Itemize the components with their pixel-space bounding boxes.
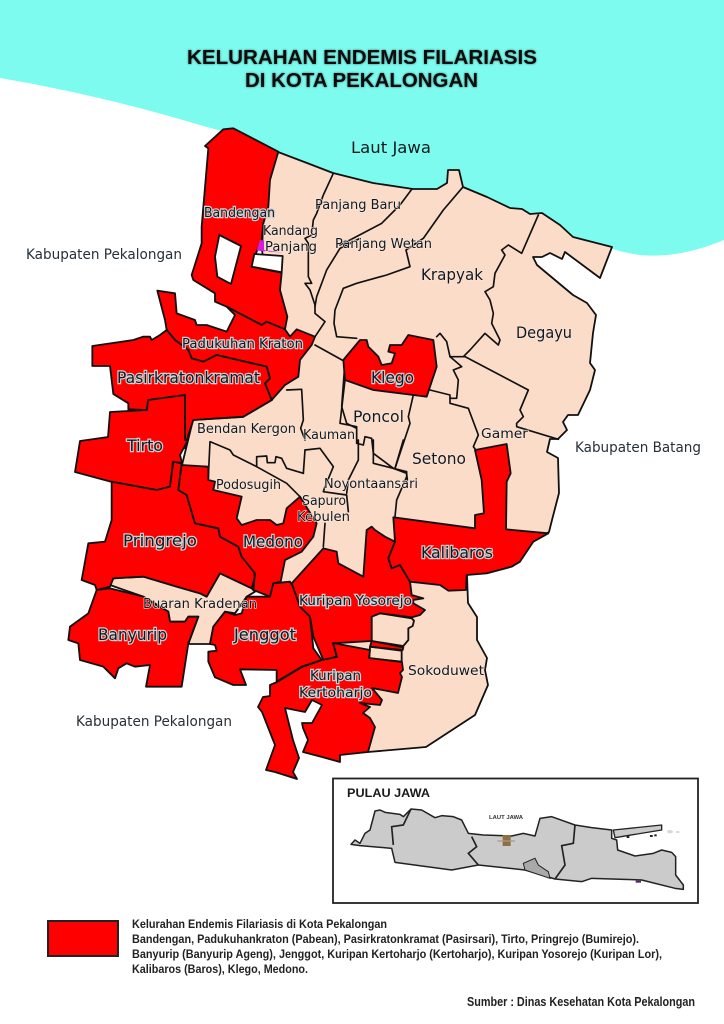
Pringrejo area: [82, 462, 255, 597]
red endemic kelurahan south-west: [68, 462, 322, 687]
label: Krapyak: Krapyak: [421, 265, 484, 284]
label: Pringrejo: Pringrejo: [123, 531, 197, 550]
label: Gamer: Gamer: [481, 427, 529, 442]
Kalibaros area: [388, 444, 548, 591]
inset heading: PULAU JAWA: [347, 786, 430, 800]
legend text: Kelurahan Endemis Filariasis di Kota Pekalongan: [132, 919, 387, 931]
cream non-endemic kelurahan: [182, 152, 612, 752]
label: Sapuro Kebulen: Kebulen: [297, 510, 350, 525]
Medono area: [178, 465, 317, 597]
Pasirkratonkramat area: [92, 330, 272, 448]
label: Podosugih: Podosugih: [216, 478, 281, 493]
label: Kabupaten Pekalongan south: Kabupaten Pekalongan: [76, 714, 232, 730]
label: Kabupaten Pekalongan north: Kabupaten Pekalongan: [26, 247, 182, 263]
white block under Kandang Panjang: [252, 254, 283, 272]
label: Banyurip: Banyurip: [98, 625, 167, 644]
legend text: Banyurip (Banyurip Ageng), Jenggot, Kuripan Kertoharjo (Kertoharjo), Kuripan Yosorejo (Kuripan Lor),: [132, 949, 662, 961]
inset panel: Pulau Jawa: [333, 778, 698, 903]
label: Bendan Kergon: Bendan Kergon: [197, 422, 296, 437]
red endemic kelurahan north-west: [92, 128, 315, 448]
label: Kauman: Kauman: [303, 428, 355, 443]
title: [187, 47, 537, 92]
label: Bandengan: Bandengan: [204, 206, 275, 221]
label: Noyontaansari: Noyontaansari: [324, 477, 418, 492]
label: Kuripan Kertoharjo: Kuripan: [310, 669, 361, 684]
Bandengan area: [192, 128, 287, 329]
Kuripan Yosorejo area: [292, 527, 425, 660]
label: Kandang Panjang: Panjang: [265, 240, 317, 255]
Jenggot area: [208, 582, 322, 685]
label: Setono: Setono: [412, 449, 466, 468]
label: Padukuhan Kraton: Padukuhan Kraton: [182, 337, 303, 352]
label: Kuripan Yosorejo: Kuripan Yosorejo: [299, 594, 412, 609]
label: Panjang Baru: Panjang Baru: [315, 198, 401, 213]
label: Buaran Kradenan: Buaran Kradenan: [143, 597, 257, 612]
map labels: [26, 138, 701, 730]
legend text: Bandengan, Padukuhankraton (Pabean), Pasirkratonkramat (Pasirsari), Tirto, Pringrejo (Bumirejo).: [132, 934, 639, 946]
label: Panjang Wetan: Panjang Wetan: [335, 237, 432, 252]
label: Laut Jawa: Laut Jawa: [351, 138, 431, 157]
map of Kota Pekalongan: [68, 128, 612, 779]
legend text: Kalibaros (Baros), Klego, Medono.: [132, 964, 308, 976]
label: Kuripan Kertoharjo: Kertoharjo: [299, 686, 372, 701]
Buaran Kradenan area: [110, 573, 255, 644]
Kuripan strip: [370, 641, 403, 650]
Padukuhan Kraton area: [157, 291, 315, 400]
label: Tirto: Tirto: [126, 436, 163, 455]
label: Kandang Panjang: Kandang: [263, 224, 318, 239]
label: Kuripan Kertoharjo: [299, 669, 372, 701]
label: Pasirkratonkramat: Pasirkratonkramat: [117, 368, 260, 387]
label: Sokoduwet: Sokoduwet: [408, 664, 484, 679]
label: Kabupaten Batang: Kabupaten Batang: [575, 440, 701, 456]
source note: Sumber : Dinas Kesehatan Kota Pekalongan: [467, 995, 695, 1009]
Kandang Panjang purple patch: [257, 240, 283, 253]
Banyurip area: [68, 588, 198, 687]
red endemic kelurahan south-east: [292, 444, 548, 660]
label: Sapuro Kebulen: Sapuro: [302, 494, 346, 509]
label: Klego: Klego: [371, 368, 414, 387]
Bandengan white enclave: [215, 235, 241, 284]
label: Degayu: Degayu: [516, 323, 572, 342]
label: Kalibaros: Kalibaros: [421, 543, 493, 562]
label: Sapuro Kebulen: [297, 494, 350, 525]
legend text: [132, 919, 662, 976]
sea background: [0, 0, 724, 256]
Klego area: [343, 335, 437, 397]
inset label: Laut Jawa: LAUT JAWA: [489, 815, 523, 821]
label: Medono: Medono: [243, 532, 303, 551]
label: Kandang Panjang: [263, 224, 318, 255]
label: Jenggot: Jenggot: [233, 625, 296, 644]
Java island map: [351, 809, 683, 889]
title: DI KOTA PEKALONGAN: [245, 70, 478, 92]
Kuripan Kertoharjo area: [258, 643, 403, 779]
Tirto area: [75, 395, 188, 490]
title: KELURAHAN ENDEMIS FILARIASIS: [187, 47, 537, 69]
label: Poncol: Poncol: [353, 407, 404, 426]
legend: [48, 919, 662, 976]
legend swatch: [48, 921, 118, 956]
